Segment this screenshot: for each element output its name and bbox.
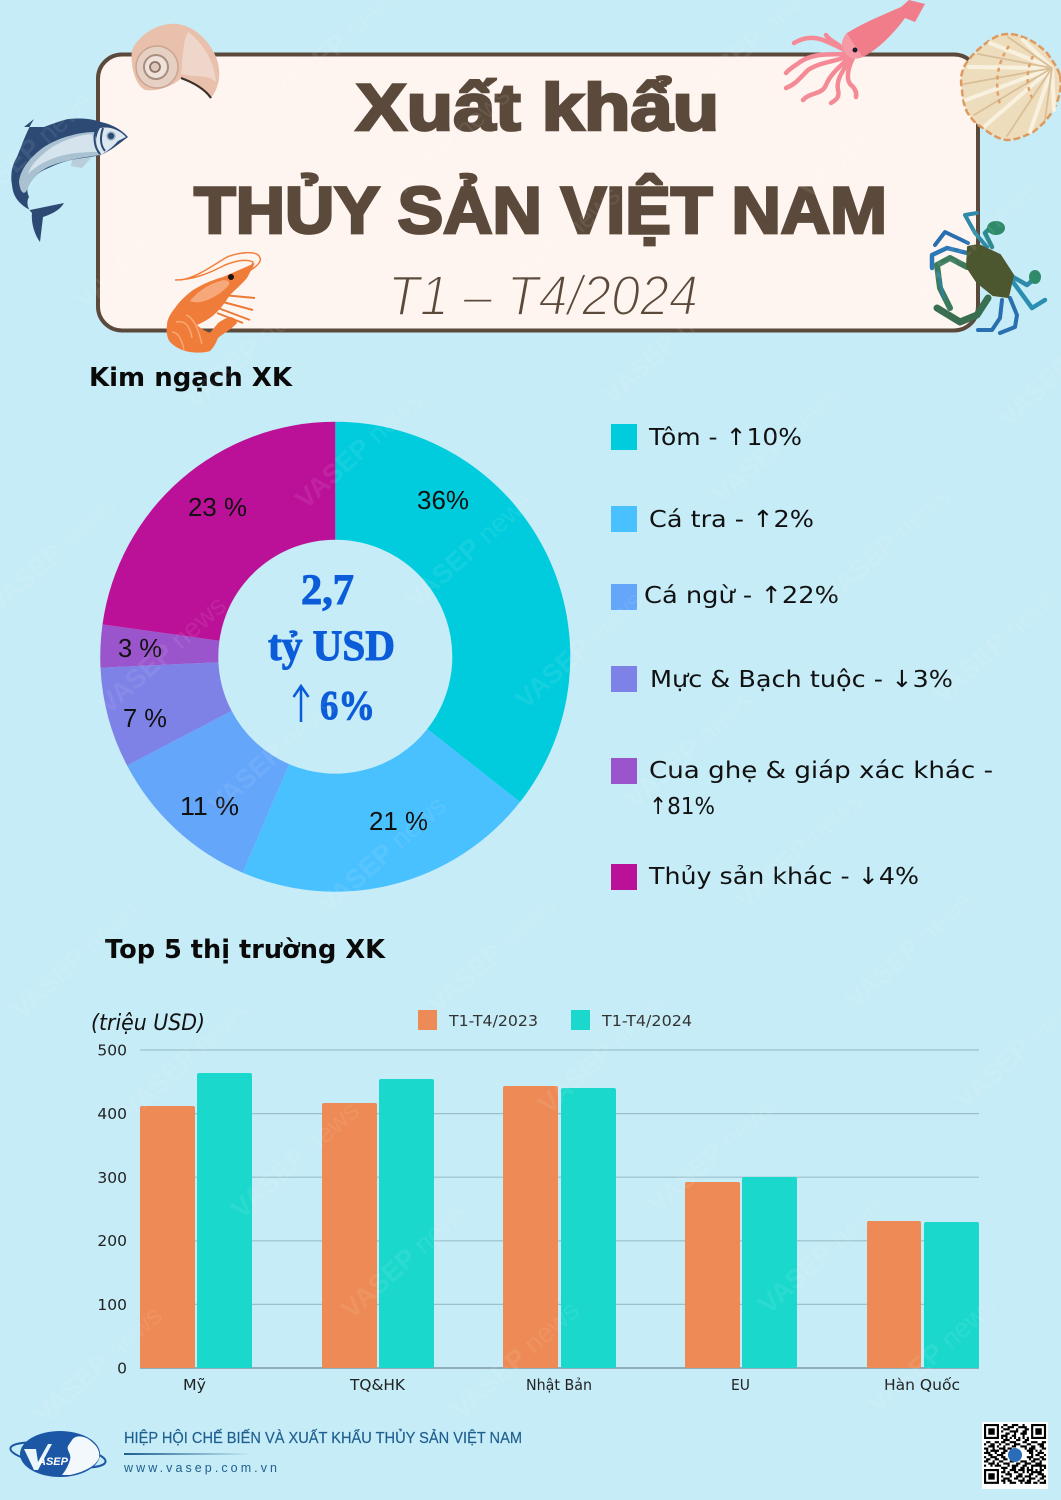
slice labels: 21 % — [369, 808, 428, 836]
watermark: VASEP news: VASEP news — [313, 790, 452, 920]
watermark: VASEP news: VASEP news — [116, 995, 255, 1125]
icon: scallop shell — [961, 34, 1061, 140]
icon: sea snail shell — [132, 24, 219, 98]
watermark: VASEP news: VASEP news — [93, 590, 232, 720]
x axis labels: EU — [731, 1376, 750, 1394]
watermark: VASEP news: VASEP news — [533, 990, 672, 1120]
legend: export categories — [611, 423, 993, 890]
legend item: other seafood: Thủy sản khác - ↓4% — [648, 862, 919, 890]
heading: export value: Kim ngạch XK — [89, 363, 293, 393]
watermark: VASEP news: VASEP news — [290, 385, 429, 515]
watermark: VASEP news: VASEP news — [863, 1290, 1002, 1420]
title line 1: Xuất khẩu — [356, 70, 719, 144]
donut centre total: tỷ USD — [268, 623, 395, 670]
chart legend: T1-T4/2023 — [448, 1012, 538, 1030]
title line 2: THỦY SẢN VIỆT NAM — [194, 173, 887, 247]
slice labels: 23 % — [188, 494, 247, 522]
slice: pangasius — [243, 729, 520, 892]
watermark: VASEP news: VASEP news — [840, 885, 979, 1015]
watermark: VASEP news: VASEP news — [446, 1295, 585, 1425]
slice labels: 7 % — [123, 705, 167, 733]
x axis labels — [183, 1376, 960, 1394]
bars: Nhật Bản — [503, 1086, 616, 1368]
slice: other seafood — [102, 422, 335, 641]
x axis labels: Nhật Bản — [526, 1376, 592, 1394]
unit label: (triệu USD) — [91, 1011, 205, 1036]
icon: fish — [11, 118, 128, 242]
watermark: VASEP news: VASEP news — [620, 685, 759, 815]
legend item: crab and crustaceans: Cua ghẹ & giáp xác khác - — [649, 756, 993, 784]
donut centre total — [268, 567, 395, 728]
icon: shrimp — [167, 253, 260, 353]
title — [194, 70, 887, 328]
grid lines — [140, 1050, 979, 1304]
footer logo: VASEP: ASEP — [37, 1456, 69, 1468]
icon: crab — [932, 213, 1045, 333]
watermark: VASEP news: VASEP news — [377, 80, 516, 210]
QR code — [982, 1422, 1048, 1489]
watermark: VASEP news: VASEP news — [400, 485, 539, 615]
slice: shrimp — [335, 422, 570, 802]
title period: T1 – T4/2024 — [388, 264, 698, 328]
donut centre total: 6% — [320, 682, 375, 728]
watermark: VASEP news: VASEP news — [794, 75, 933, 205]
title panel — [98, 54, 978, 330]
watermark: VASEP news: VASEP news — [6, 895, 145, 1025]
y axis labels: 400 — [97, 1105, 127, 1123]
x axis labels: Hàn Quốc — [884, 1376, 960, 1394]
watermark: VASEP news: VASEP news — [336, 1195, 475, 1325]
y axis labels: 500 — [97, 1042, 127, 1060]
watermark: VASEP news: VASEP news — [226, 1095, 365, 1225]
slice: squid and octopus — [100, 662, 232, 766]
chart legend — [418, 1010, 692, 1030]
x axis labels: TQ&HK — [349, 1376, 406, 1394]
watermark: VASEP news: VASEP news — [730, 785, 869, 915]
watermark: VASEP news: VASEP news — [180, 285, 319, 415]
watermark: VASEP news: VASEP news — [29, 1300, 168, 1430]
chart legend: T1-T4/2024 — [601, 1012, 692, 1030]
slice: tuna — [127, 711, 289, 873]
watermark: VASEP news: VASEP news — [510, 585, 649, 715]
footer logo: VASEP — [9, 1431, 107, 1477]
y axis labels — [97, 1042, 127, 1378]
watermark: VASEP news: VASEP news — [707, 380, 846, 510]
legend item: squid and octopus: Mực & Bạch tuộc - ↓3% — [650, 665, 953, 693]
watermark: VASEP news: VASEP news — [423, 890, 562, 1020]
bar chart: top 5 markets — [97, 1042, 979, 1394]
legend item: crab and crustaceans — [611, 756, 993, 820]
watermark: VASEP news: VASEP news — [487, 180, 626, 310]
donut centre total: 2,7 — [301, 567, 354, 614]
legend item: shrimp: Tôm - ↑10% — [648, 423, 802, 451]
legend item: pangasius: Cá tra - ↑2% — [649, 505, 814, 533]
bars: Mỹ — [140, 1073, 252, 1368]
y axis labels: 200 — [97, 1232, 127, 1250]
footer website: www.vasep.com.vn — [123, 1461, 277, 1475]
heading: top 5 markets: Top 5 thị trường XK — [105, 935, 386, 965]
legend item: crab and crustaceans: ↑81% — [649, 792, 715, 820]
legend item: tuna: Cá ngừ - ↑22% — [644, 581, 839, 609]
slice labels: 11 % — [180, 793, 239, 821]
watermark: VASEP news: VASEP news — [597, 280, 736, 410]
y axis labels: 300 — [97, 1169, 127, 1187]
icon: squid — [786, 0, 925, 103]
bars: EU — [685, 1177, 797, 1368]
y axis labels: 100 — [97, 1296, 127, 1314]
slice labels — [118, 487, 469, 836]
watermark: VASEP news: VASEP news — [643, 1090, 782, 1220]
watermark: VASEP news: VASEP news — [70, 185, 209, 315]
donut chart — [100, 422, 570, 892]
watermark: VASEP news: VASEP news — [817, 480, 956, 610]
watermark: VASEP news: VASEP news — [203, 690, 342, 820]
slice labels: 3 % — [118, 635, 162, 663]
y axis labels: 0 — [117, 1360, 127, 1378]
slice labels: 36% — [417, 487, 469, 515]
bars: Hàn Quốc — [867, 1221, 979, 1368]
slice: crab and crustaceans — [100, 624, 219, 668]
watermark: VASEP news: VASEP news — [753, 1190, 892, 1320]
footer organisation name: HIỆP HỘI CHẾ BIẾN VÀ XUẤT KHẨU THỦY SẢN VIỆT NAM — [124, 1428, 522, 1447]
bars: TQ&HK — [322, 1079, 434, 1368]
x axis labels: Mỹ — [183, 1376, 206, 1394]
watermark: VASEP news: VASEP news — [904, 175, 1043, 305]
